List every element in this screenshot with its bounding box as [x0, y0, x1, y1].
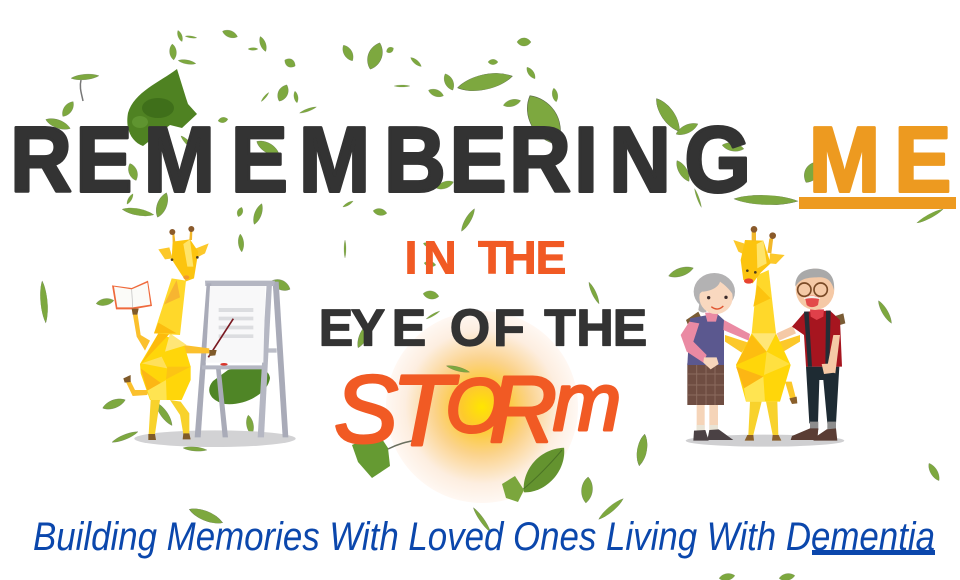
- underline under Me: [799, 197, 956, 209]
- giraffe legs: [149, 400, 189, 434]
- book: [112, 281, 152, 309]
- giraffe body: [140, 333, 191, 400]
- tagline underline: [812, 550, 935, 555]
- giraffe body: [736, 333, 791, 402]
- subtitle: In the: IN THE: [405, 232, 566, 284]
- word: Me: ME: [809, 107, 951, 211]
- word: Remembering: REMEMBERING: [10, 107, 751, 211]
- giraffe arms and leg: [725, 335, 800, 398]
- subtitle: Eye of the: EYE OF THE: [319, 300, 647, 358]
- giraffe neck: [752, 270, 776, 333]
- giraffe head: [733, 226, 785, 284]
- giraffe head: [158, 226, 209, 281]
- giraffe legs: [748, 402, 778, 435]
- elderly man: [777, 269, 845, 441]
- word: Storm: STORm: [334, 355, 621, 467]
- curled stem top left: [80, 80, 83, 101]
- leaf stem by storm: [388, 440, 416, 449]
- large leaf lower centre: [502, 439, 574, 502]
- illustration: giraffe with elderly couple: [681, 226, 845, 447]
- large leaf by the easel: [209, 367, 270, 404]
- giraffe hooves: [745, 397, 797, 441]
- ground shadow: [686, 435, 844, 447]
- hooves and hands: [123, 309, 217, 440]
- easel: [195, 281, 288, 437]
- illustration: giraffe teaching at easel: [112, 226, 296, 447]
- giraffe neck: [154, 278, 186, 335]
- jagged leaf by storm: [352, 433, 390, 478]
- storm glow: [386, 311, 578, 503]
- giraffe limbs: [125, 313, 209, 396]
- ground shadow: [134, 430, 296, 447]
- title: Remembering Me: [10, 107, 956, 211]
- large dark leaf top left: [127, 69, 197, 146]
- elderly woman: [681, 273, 750, 441]
